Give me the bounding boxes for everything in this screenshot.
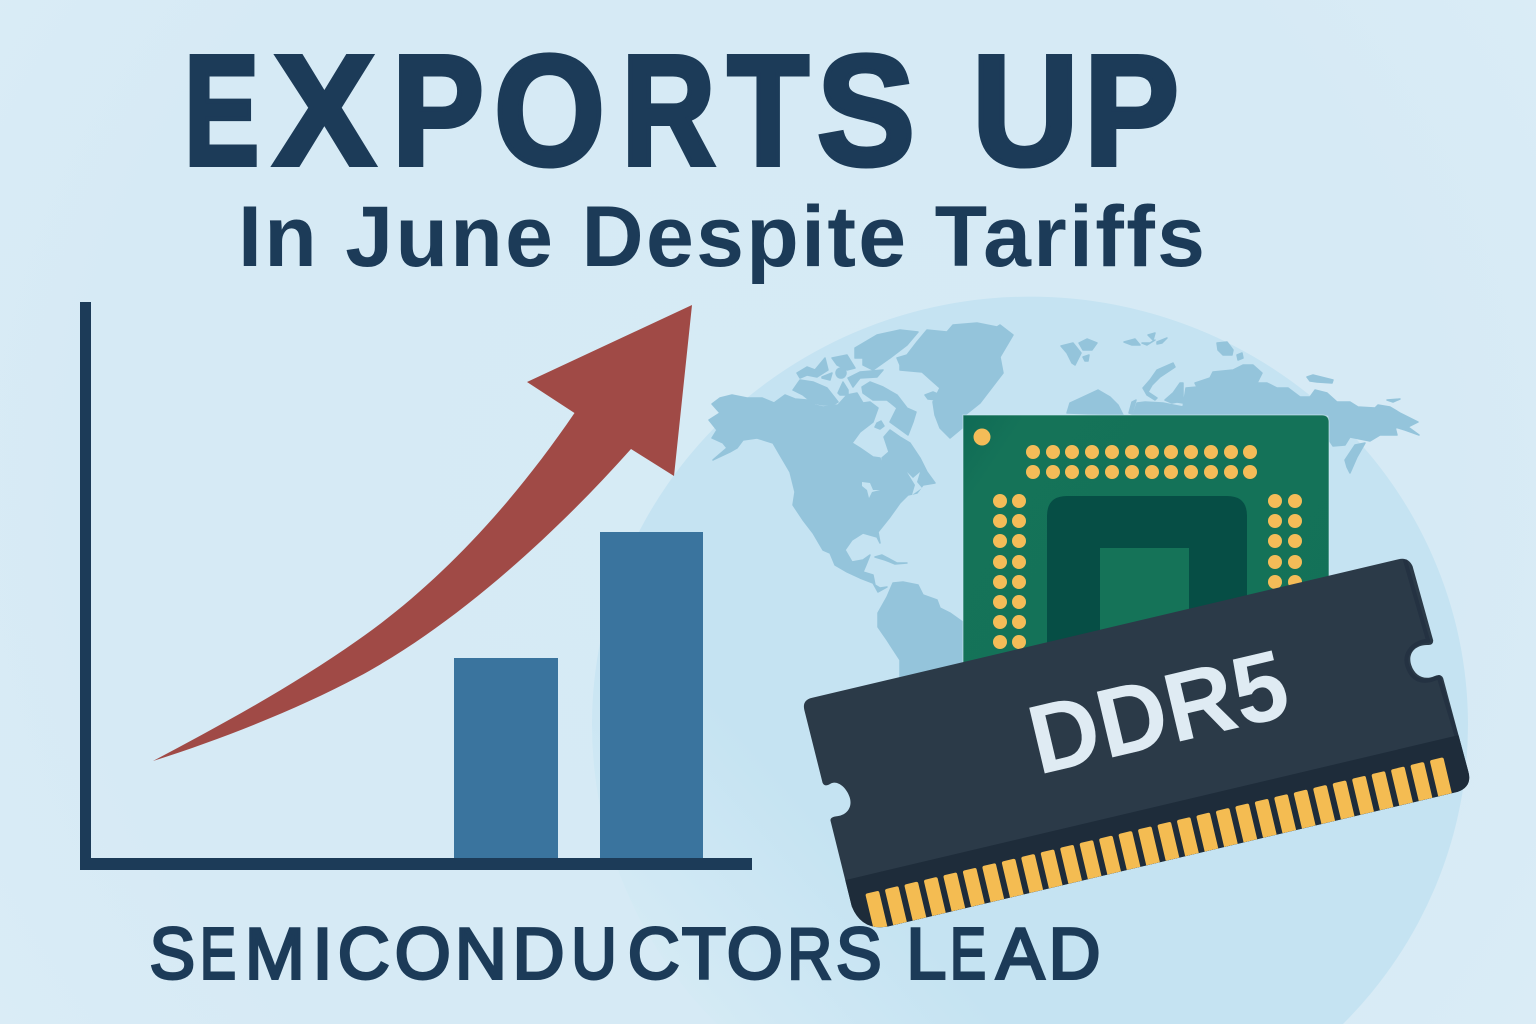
caption: O (727, 915, 783, 995)
caption: C (338, 915, 390, 995)
title: U (972, 24, 1079, 198)
Severnaya Zemlya (1217, 342, 1243, 360)
lakes and gulfs (862, 472, 922, 498)
module board (802, 555, 1472, 934)
Scandinavia (1067, 390, 1136, 415)
caption: S (836, 915, 882, 995)
bar: smaller (454, 658, 558, 858)
Franz Josef Land (1124, 333, 1167, 345)
title: X (274, 24, 375, 198)
caption: M (245, 915, 305, 995)
caption: E (200, 915, 236, 995)
title: S (817, 24, 915, 198)
world map landmasses (709, 323, 1419, 685)
caption: T (682, 915, 726, 995)
Baffin Island (862, 382, 916, 435)
Arctic islands (793, 330, 918, 405)
Wrangel and far north islets (1307, 375, 1400, 402)
globe disc (592, 297, 1468, 1024)
DDR5 memory module (798, 553, 1482, 940)
module label: DDR5 (1018, 628, 1298, 795)
Greenland (897, 323, 1013, 438)
caption: S (150, 915, 195, 995)
caption: L (906, 915, 946, 995)
chip solder pads (974, 428, 1302, 649)
subtitle: In June Despite Tariffs (238, 189, 1205, 285)
caption: U (571, 915, 617, 995)
module contact band and pins (845, 560, 1470, 928)
processor chip (963, 415, 1329, 700)
chart axes (80, 302, 752, 870)
caption: I (312, 915, 333, 995)
caption: C (628, 915, 680, 995)
title: E (184, 24, 259, 198)
Siberia (1133, 365, 1419, 446)
caption: E (950, 915, 986, 995)
title: T (728, 24, 809, 198)
chip die (1100, 548, 1189, 698)
title: P (392, 24, 484, 198)
bar chart (454, 532, 703, 858)
chip body (963, 415, 1329, 700)
chip inner recess (1047, 496, 1247, 700)
caption: D (1048, 915, 1100, 995)
arrow: rising trend (153, 305, 692, 761)
caption: R (787, 915, 832, 995)
Svalbard (1061, 339, 1097, 365)
title: O (494, 24, 605, 198)
Novaya Zemlya (1143, 363, 1175, 400)
caption: A (996, 915, 1044, 995)
North America (709, 393, 935, 592)
South America (878, 582, 964, 685)
title: P (1084, 24, 1179, 198)
Hudson region island (836, 368, 846, 378)
globe (592, 297, 1468, 1024)
Kamchatka (1345, 443, 1365, 473)
Caribbean (875, 555, 907, 564)
caption: O (395, 915, 451, 995)
caption: D (512, 915, 564, 995)
title: R (622, 24, 716, 198)
caption: N (455, 915, 507, 995)
bar: larger (600, 532, 703, 858)
